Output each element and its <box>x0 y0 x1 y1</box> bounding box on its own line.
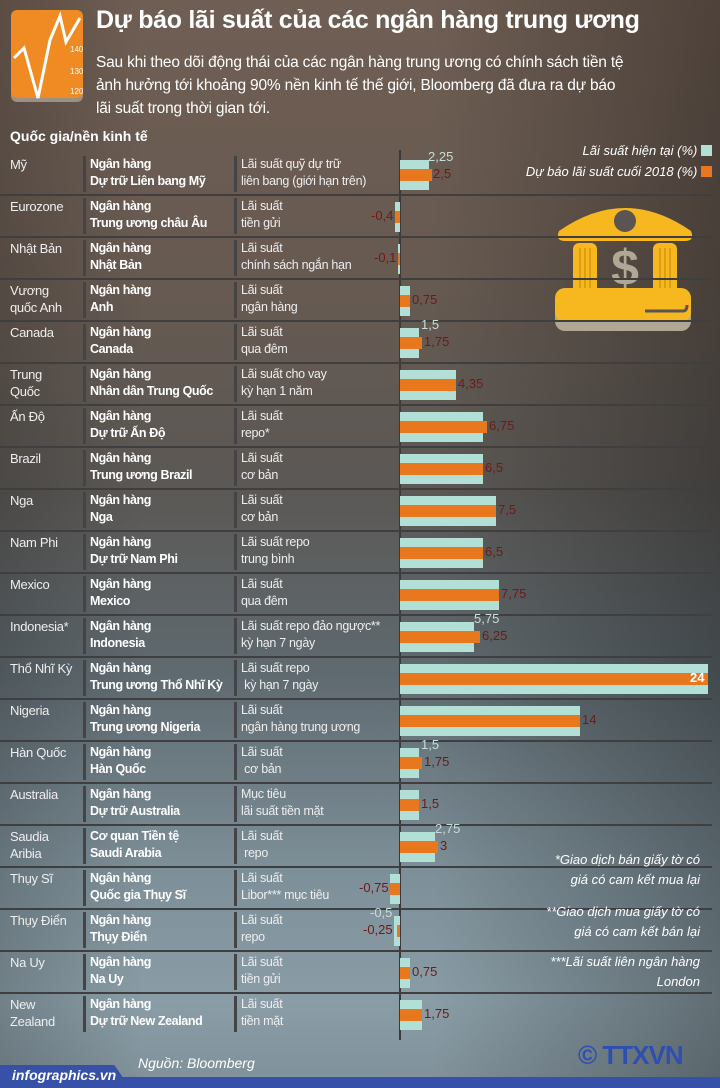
row: Hàn Quốc: 1,5 <box>421 737 439 752</box>
row: Canada: Canada <box>10 325 54 340</box>
row: Nigeria <box>0 702 712 742</box>
row: Ấn Độ: repo* <box>241 426 269 440</box>
row: Brazil <box>0 450 647 490</box>
row: Mexico: 7,75 <box>501 586 526 601</box>
row: Anh <box>0 282 712 322</box>
row: Anh: Vương <box>10 283 49 298</box>
row: Mexico: Mexico <box>90 594 130 608</box>
logo: TTXVN: © TTXVN <box>578 1040 683 1070</box>
row: Hàn Quốc: Hàn Quốc <box>10 745 66 760</box>
footnotes <box>546 852 700 989</box>
row: Thụy Điển: repo <box>241 930 265 944</box>
row: Nigeria: Nigeria <box>10 703 49 718</box>
row: Saudi Arabia: Aribia <box>10 846 41 861</box>
icon: bank <box>555 208 692 331</box>
row: Nam Phi: Ngân hàng <box>90 535 151 549</box>
row: Indonesia: kỳ hạn 7 ngày <box>241 636 315 650</box>
icon: chart <box>11 10 84 102</box>
row: Thổ Nhĩ Kỳ: 24 <box>690 670 704 685</box>
row: Canada: Ngân hàng <box>90 325 151 339</box>
row: Eurozone: Lãi suất <box>241 199 282 213</box>
row: Nigeria: 14 <box>582 712 596 727</box>
row: New Zealand: 1,75 <box>424 1006 449 1021</box>
row: Trung Quốc: Ngân hàng <box>90 367 151 381</box>
row: Australia: lãi suất tiền mặt <box>241 804 323 818</box>
intro text <box>96 54 623 117</box>
row: Brazil: Trung ương Brazil <box>90 468 192 482</box>
row: Eurozone: tiền gửi <box>241 216 280 230</box>
row: Ấn Độ <box>0 408 665 448</box>
row: Anh: Ngân hàng <box>90 283 151 297</box>
row: Indonesia: Indonesia* <box>10 619 68 634</box>
legend <box>526 143 712 179</box>
axis <box>399 150 401 1040</box>
row: Trung Quốc <box>0 366 679 406</box>
row: Na Uy: Lãi suất <box>241 955 282 969</box>
row: Mỹ: Lãi suất quỹ dự trữ <box>241 157 341 171</box>
row: Mỹ: Ngân hàng <box>90 157 151 171</box>
row: Anh: 0,75 <box>412 292 437 307</box>
row: Thụy Điển: -0,5 <box>370 905 392 920</box>
row: Australia: Mục tiêu <box>241 787 286 801</box>
row: Australia: 1,5 <box>421 796 439 811</box>
footnotes: ***Lãi suất liên ngân hàng <box>550 954 700 969</box>
icon: chart: 120 <box>70 87 84 96</box>
title: Dự báo lãi suất của các ngân hàng trung ương <box>96 6 640 34</box>
row: Nigeria: Ngân hàng <box>90 703 151 717</box>
row: Thụy Điển: Thụy Điển <box>10 913 67 928</box>
row: Saudi Arabia: Cơ quan Tiền tệ <box>90 829 179 843</box>
row: Nhật Bản: Ngân hàng <box>90 241 151 255</box>
row: Canada: qua đêm <box>241 342 288 356</box>
row: Ấn Độ: Dự trữ Ấn Độ <box>90 426 165 440</box>
row: Canada <box>0 317 699 364</box>
intro text: lãi suất trong thời gian tới. <box>96 100 270 117</box>
row: Nhật Bản: chính sách ngắn hạn <box>241 258 351 272</box>
row: Thụy Sĩ: Lãi suất <box>241 871 282 885</box>
row: Saudi Arabia: 2,75 <box>435 821 460 836</box>
row: Nhật Bản <box>0 240 712 280</box>
row: Nga <box>0 492 649 532</box>
row: Canada: Canada <box>90 342 133 356</box>
row: Nigeria: Trung ương Nigeria <box>90 720 200 734</box>
row: Thụy Điển <box>0 905 712 952</box>
row: Ấn Độ: Lãi suất <box>241 409 282 423</box>
intro text: Sau khi theo dõi động thái của các ngân hàng trung ương có chính sách tiền tệ <box>96 54 623 71</box>
row: New Zealand: tiền mặt <box>241 1014 283 1028</box>
row: Trung Quốc: Nhân dân Trung Quốc <box>90 384 213 398</box>
icon: bank: $ <box>611 240 639 296</box>
row: Trung Quốc: 4,35 <box>458 376 483 391</box>
row: Hàn Quốc: Ngân hàng <box>90 745 151 759</box>
row: Thụy Điển: -0,25 <box>363 922 393 937</box>
row: Ấn Độ: 6,75 <box>489 418 514 433</box>
row: Indonesia: Ngân hàng <box>90 619 151 633</box>
icon: chart: 130 <box>70 67 84 76</box>
intro text: ảnh hưởng tới khoảng 90% nền kinh tế thế giới, Bloomberg đã đưa ra dự báo <box>96 77 615 94</box>
row: Trung Quốc: Trung <box>10 367 42 382</box>
row: Australia: Dự trữ Australia <box>90 804 180 818</box>
row: Indonesia: 5,75 <box>474 611 499 626</box>
row: Thụy Sĩ <box>0 870 712 910</box>
row: Thụy Sĩ: Thụy Sĩ <box>10 871 53 886</box>
row: Hàn Quốc: Lãi suất <box>241 745 282 759</box>
row: Hàn Quốc: cơ bản <box>244 762 281 776</box>
row: Canada: 1,75 <box>424 334 449 349</box>
row: Thổ Nhĩ Kỳ: Thổ Nhĩ Kỳ <box>10 661 72 676</box>
row: Trung Quốc: Lãi suất cho vay <box>241 367 327 381</box>
row: Anh: ngân hàng <box>241 300 297 314</box>
row: New Zealand <box>10 996 449 1032</box>
row: Canada: Lãi suất <box>241 325 282 339</box>
row: Nhật Bản: Lãi suất <box>241 241 282 255</box>
row: Nam Phi: 6,5 <box>485 544 503 559</box>
column heading: Quốc gia/nền kinh tế <box>10 128 148 144</box>
row: Nam Phi: Nam Phi <box>10 535 58 550</box>
row: Hàn Quốc: Hàn Quốc <box>90 762 146 776</box>
row: Hàn Quốc: 1,75 <box>424 754 449 769</box>
row: Canada: 1,5 <box>421 317 439 332</box>
row: Anh: Lãi suất <box>241 283 282 297</box>
row: Na Uy: tiền gửi <box>241 972 280 986</box>
row: Indonesia <box>0 611 712 658</box>
row: Thổ Nhĩ Kỳ: Ngân hàng <box>90 661 151 675</box>
row: Na Uy: Na Uy <box>10 955 45 970</box>
footnotes: giá có cam kết mua lại <box>571 872 700 887</box>
row: Nigeria: ngân hàng trung ương <box>241 720 360 734</box>
footer brand tab: infographics.vn <box>12 1067 116 1083</box>
row: Thụy Sĩ: Ngân hàng <box>90 871 151 885</box>
row: Australia: Ngân hàng <box>90 787 151 801</box>
row: Mỹ: liên bang (giới hạn trên) <box>241 174 366 188</box>
row: Nhật Bản: Nhật Bản <box>10 241 62 256</box>
row: Mỹ: 2,5 <box>433 166 451 181</box>
row: Eurozone: -0,4 <box>371 208 393 223</box>
row: Mỹ: Dự trữ Liên bang Mỹ <box>90 174 205 188</box>
row: Nam Phi: trung bình <box>241 552 294 566</box>
row: Mexico: Lãi suất <box>241 577 282 591</box>
row: Saudi Arabia: repo <box>244 846 268 860</box>
row: Nhật Bản: Nhật Bản <box>90 258 142 272</box>
row: Thụy Điển: Lãi suất <box>241 913 282 927</box>
row: Mexico: qua đêm <box>241 594 288 608</box>
row: Hàn Quốc <box>0 737 712 784</box>
row: Saudi Arabia <box>0 821 712 868</box>
row: Thổ Nhĩ Kỳ: Trung ương Thổ Nhĩ Kỳ <box>90 678 222 692</box>
row: Ấn Độ: Ấn Độ <box>10 409 45 424</box>
row: New Zealand: Ngân hàng <box>90 997 151 1011</box>
footer bar <box>0 1077 720 1088</box>
row: New Zealand: New <box>10 997 35 1012</box>
row: Mỹ: Mỹ <box>10 157 27 172</box>
row: Trung Quốc: Quốc <box>10 384 40 399</box>
row: Eurozone <box>0 198 712 238</box>
row: Indonesia: 6,25 <box>482 628 507 643</box>
row: Nam Phi <box>0 534 687 574</box>
row: Indonesia: Indonesia <box>90 636 145 650</box>
row: Brazil: Brazil <box>10 451 41 466</box>
row: New Zealand: Lãi suất <box>241 997 282 1011</box>
row: Eurozone: Eurozone <box>10 199 63 214</box>
row: Saudi Arabia: Lãi suất <box>241 829 282 843</box>
row: Nam Phi: Lãi suất repo <box>241 535 309 549</box>
row: Thụy Điển: Thụy Điển <box>90 930 147 944</box>
row: Nigeria: Lãi suất <box>241 703 282 717</box>
row: Nga: Lãi suất <box>241 493 282 507</box>
legend: Dự báo lãi suất cuối 2018 (%) <box>526 164 697 179</box>
row: New Zealand: Zealand <box>10 1014 55 1029</box>
row: Australia: Australia <box>10 787 58 802</box>
row: Mexico: Mexico <box>10 577 49 592</box>
row: Brazil: Lãi suất <box>241 451 282 465</box>
row: Saudi Arabia: 3 <box>440 838 447 853</box>
footnotes: giá có cam kết bán lại <box>574 924 700 939</box>
row: Mexico: Ngân hàng <box>90 577 151 591</box>
row: Brazil: 6,5 <box>485 460 503 475</box>
row: Indonesia: Lãi suất repo đảo ngược** <box>241 619 380 633</box>
row: Thụy Sĩ: Libor*** mục tiêu <box>241 888 329 902</box>
row: Na Uy: Na Uy <box>90 972 123 986</box>
row: Nam Phi: Dự trữ Nam Phi <box>90 552 178 566</box>
row: Ấn Độ: Ngân hàng <box>90 409 151 423</box>
row: Saudi Arabia: Saudi Arabia <box>90 846 161 860</box>
source: Nguồn: Bloomberg <box>138 1055 255 1071</box>
row: Thổ Nhĩ Kỳ <box>0 660 712 700</box>
footnotes: *Giao dịch bán giấy tờ có <box>555 852 700 867</box>
row: Brazil: Ngân hàng <box>90 451 151 465</box>
row: Mỹ: 2,25 <box>428 149 453 164</box>
row: Anh: quốc Anh <box>10 300 62 315</box>
row: Thổ Nhĩ Kỳ: Lãi suất repo <box>241 661 309 675</box>
row: Australia <box>0 786 712 826</box>
row: Brazil: cơ bản <box>241 468 278 482</box>
row: Saudi Arabia: Saudia <box>10 829 49 844</box>
row: Nhật Bản: -0,1 <box>374 250 396 265</box>
row: Nga: Nga <box>90 510 112 524</box>
row: Eurozone: Trung ương châu Âu <box>90 216 207 230</box>
row: Thụy Sĩ: Quốc gia Thụy Sĩ <box>90 888 186 902</box>
row: Na Uy <box>0 954 712 994</box>
row: Eurozone: Ngân hàng <box>90 199 151 213</box>
row: Na Uy: 0,75 <box>412 964 437 979</box>
row: Mexico <box>0 576 712 616</box>
row: Thụy Sĩ: -0,75 <box>359 880 389 895</box>
footnotes: **Giao dịch mua giấy tờ có <box>546 904 700 919</box>
row: Nga: Ngân hàng <box>90 493 151 507</box>
row: Thụy Điển: Ngân hàng <box>90 913 151 927</box>
row: Mỹ <box>0 149 712 196</box>
row: Thổ Nhĩ Kỳ: kỳ hạn 7 ngày <box>244 678 318 692</box>
row: Anh: Anh <box>90 300 113 314</box>
row: Na Uy: Ngân hàng <box>90 955 151 969</box>
footnotes: London <box>657 974 700 989</box>
row: Nga: cơ bản <box>241 510 278 524</box>
row: New Zealand: Dự trữ New Zealand <box>90 1014 202 1028</box>
row: Nga: Nga <box>10 493 33 508</box>
row: Trung Quốc: kỳ hạn 1 năm <box>241 384 312 398</box>
icon: chart: 140 <box>70 45 84 54</box>
legend: Lãi suất hiện tại (%) <box>582 143 697 158</box>
row: Nga: 7,5 <box>498 502 516 517</box>
